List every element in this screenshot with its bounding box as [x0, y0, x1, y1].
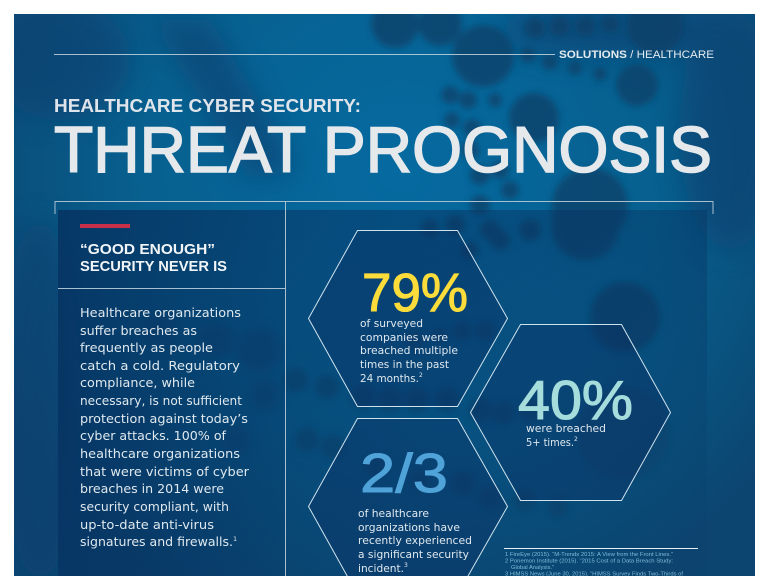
- footnotes: 2 Ponemon Institute (2015). “2015 Cost of a Data Breach Study:: [505, 558, 674, 564]
- sidebar body text: that were victims of cyber: [80, 464, 250, 479]
- hexagon stat: 2/3: 2/3: [360, 442, 448, 504]
- sidebar body text: necessary, is not sufficient: [80, 393, 242, 408]
- hexagon stat: 2/3: organizations have: [358, 521, 460, 534]
- sidebar body text: security compliant, with: [80, 499, 229, 514]
- hexagon stat: 2/3: 3: [404, 562, 408, 569]
- hexagon stat: 79%: of surveyed: [360, 317, 423, 330]
- hexagon stat: 40%: 5+ times.: [526, 436, 574, 449]
- footnotes: [504, 548, 698, 576]
- hexagon stat: 79%: companies were: [360, 331, 448, 344]
- hexagon stat: 79%: times in the past: [360, 358, 450, 371]
- section label: SOLUTIONS / HEALTHCARE: [559, 49, 714, 61]
- hexagon stat: 2/3: incident.: [358, 562, 404, 575]
- hexagon stat: 40%: 2: [574, 436, 578, 443]
- sidebar body text: suffer breaches as: [80, 323, 197, 338]
- hexagon stat: 2/3: [308, 418, 508, 576]
- hexagon stat: 2/3: of healthcare: [358, 507, 429, 520]
- title: THREAT PROGNOSIS: [54, 113, 712, 186]
- sidebar body text: compliance, while: [80, 375, 195, 390]
- panel: good enough sidebar: [58, 210, 285, 576]
- hexagon stat: 79%: breached multiple: [360, 344, 458, 357]
- sidebar body text: breaches in 2014 were: [80, 481, 224, 496]
- hexagon stat: 40%: 40%: [518, 369, 633, 431]
- sidebar heading: “GOOD ENOUGH”: [80, 241, 215, 258]
- sidebar body text: healthcare organizations: [80, 446, 240, 461]
- sidebar body text: catch a cold. Regulatory: [80, 358, 241, 373]
- hexagon stat: 40%: [470, 324, 670, 500]
- sidebar body text: Healthcare organizations: [80, 305, 241, 320]
- hexagon stat: 79%: 24 months.: [360, 372, 419, 385]
- header rule: [54, 54, 555, 55]
- sidebar body text: 1: [233, 535, 237, 543]
- accent bar: [80, 224, 130, 228]
- panel: content backdrop: [58, 210, 707, 576]
- frame: panel top rule and corner brackets: [55, 202, 713, 576]
- sidebar divider: [58, 288, 285, 289]
- sidebar body text: cyber attacks. 100% of: [80, 428, 227, 443]
- hexagon stat: 79%: 2: [419, 372, 423, 379]
- sidebar heading: SECURITY NEVER IS: [80, 258, 227, 275]
- sidebar body text: frequently as people: [80, 340, 213, 355]
- footnotes: 1 FireEye (2015). “M-Trends 2015: A View from the Front Lines.”: [505, 552, 673, 558]
- hexagon stat: 40%: were breached: [526, 422, 606, 435]
- hexagon stat: 79%: 79%: [362, 263, 468, 323]
- hexagon stat: 2/3: a significant security: [358, 548, 469, 561]
- sidebar body text: signatures and firewalls.: [80, 534, 233, 549]
- hexagon stat: 79%: [308, 230, 508, 406]
- footnotes: Global Analysis.”: [511, 565, 554, 571]
- heading: kicker: HEALTHCARE CYBER SECURITY:: [54, 96, 361, 116]
- hexagon stat: 2/3: recently experienced: [358, 534, 472, 547]
- sidebar body text: up-to-date anti-virus: [80, 517, 214, 532]
- sidebar body text: protection against today’s: [80, 411, 248, 426]
